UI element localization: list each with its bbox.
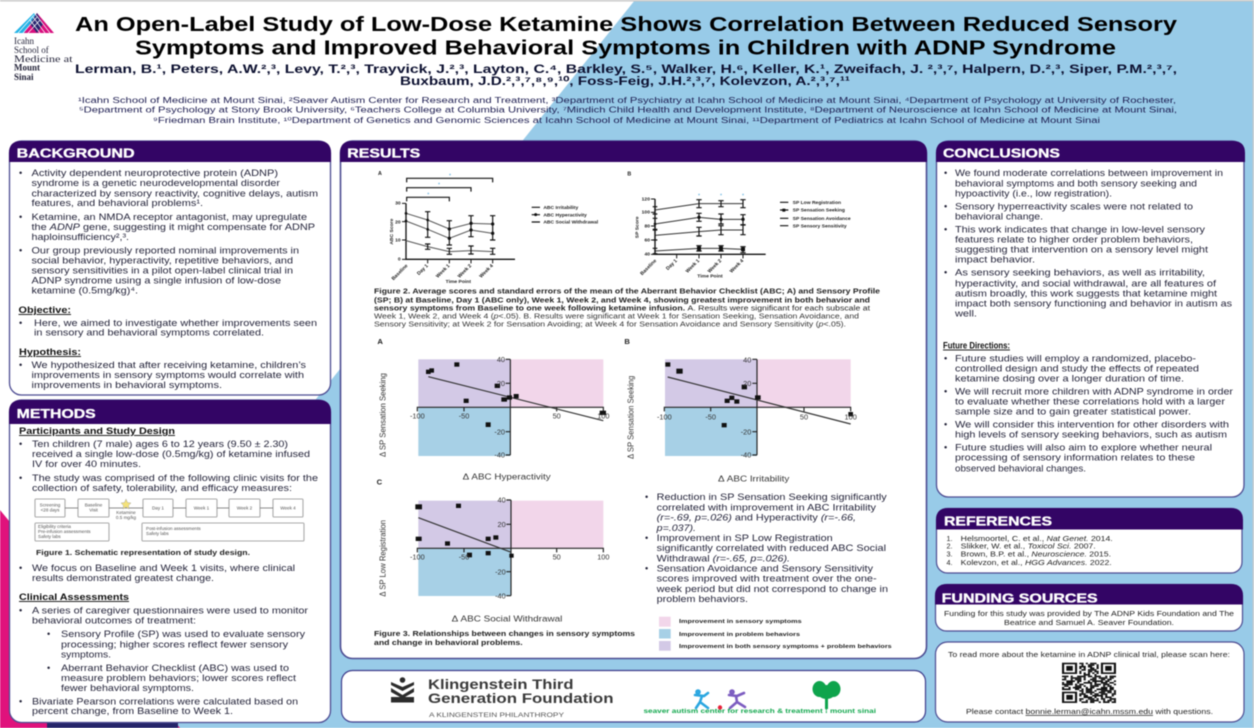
results bullets: Reduction in SP Sensation Seeking significantly bbox=[657, 492, 887, 502]
scatter plot A: -100 bbox=[410, 412, 425, 421]
logo: Icahn School of Medicine at Mount Sinai: School of bbox=[14, 45, 49, 55]
conclusions text: well. bbox=[954, 308, 977, 318]
results bullets: Sensation Avoidance and Sensory Sensitivity bbox=[657, 564, 873, 574]
significance brackets: * bbox=[438, 183, 440, 189]
scatter plot B bbox=[624, 337, 857, 484]
heading: funding sources: FUNDING SOURCES bbox=[942, 590, 1098, 606]
reference list: 3. bbox=[946, 550, 952, 558]
panel: sponsor logos bbox=[342, 670, 926, 722]
study design schematic: Safety labs bbox=[38, 534, 61, 539]
scatter plot A: 40 bbox=[497, 355, 505, 364]
participants and study design: • bbox=[19, 473, 22, 483]
reference list: Kolevzon, et al., HGG Advances. 2022. bbox=[961, 558, 1112, 567]
future directions: ketamine dosing over a longer duration of time. bbox=[955, 374, 1184, 384]
clinical assessments: Sensory Profile (SP) was used to evaluate sensory bbox=[61, 629, 305, 639]
line chart B: SP scores: SP Score bbox=[634, 216, 640, 238]
participants and study design: Participants and Study Design bbox=[19, 426, 175, 436]
icon: Mount Sinai tree bbox=[812, 681, 840, 709]
line chart A: ABC scores: 0 bbox=[398, 257, 401, 263]
background text: Our group previously reported nominal improvements in bbox=[32, 246, 299, 256]
quadrant legend: Improvement in problem behaviors bbox=[679, 632, 800, 638]
significance brackets: * bbox=[427, 193, 429, 199]
scatter plot A: -20 bbox=[494, 427, 505, 436]
clinical assessments: percent change, from Baseline to Week 1. bbox=[32, 706, 233, 716]
conclusions text: Sensory hyperreactivity scales were not related to bbox=[955, 202, 1193, 212]
panel: results bbox=[340, 141, 927, 658]
study design schematic: Eligibility criteria bbox=[38, 524, 71, 529]
clinical assessments: • bbox=[19, 606, 22, 616]
figure 2 caption bbox=[374, 289, 880, 328]
clinical assessments: processing; higher scores reflect fewer sensory bbox=[61, 640, 288, 650]
future directions: sample size and to gain greater statistical power. bbox=[955, 406, 1191, 416]
results bullets: correlated with improvement in ABC Irritability bbox=[657, 502, 876, 512]
scatter plot B: -100 bbox=[657, 412, 672, 421]
heading: methods: METHODS bbox=[17, 406, 96, 421]
background text: characterized by sensory reactivity, cognitive delays, autism bbox=[32, 188, 318, 198]
affiliations: ⁹Friedman Brain Institute, ¹⁰Department of Genetics and Genomic Sciences at Icahn School of Medicine at Mount Sinai, ¹¹Department of Pediatrics at Icahn School of Medicine at Mount Sinai bbox=[153, 116, 1100, 125]
future directions: • bbox=[944, 354, 947, 364]
future directions: Future studies will employ a randomized, placebo- bbox=[955, 354, 1196, 364]
scatter plot C: 40 bbox=[498, 496, 506, 505]
scatter plot C: Δ ABC Social Withdrawal bbox=[452, 614, 563, 624]
line chart B: SP scores: Time Point bbox=[697, 274, 723, 280]
heading: references: REFERENCES bbox=[944, 514, 1052, 528]
background text: the ADNP gene, suggesting it might compensate for ADNP bbox=[32, 222, 315, 232]
conclusions text: • bbox=[944, 224, 947, 234]
funding text bbox=[944, 609, 1234, 627]
clinical assessments bbox=[19, 592, 308, 716]
scatter plot B: 40 bbox=[743, 355, 751, 364]
conclusions text: hypoactivity (i.e., low registration). bbox=[955, 188, 1112, 198]
significance brackets: * bbox=[449, 173, 451, 179]
conclusions text: autism broadly, this work suggests that ketamine might bbox=[955, 288, 1218, 298]
study design schematic: Week 4 bbox=[280, 506, 296, 510]
scatter plot C: -20 bbox=[495, 567, 506, 576]
study design schematic: Post-infusion assessments bbox=[146, 526, 201, 531]
hypothesis: improvements in behavioral symptoms. bbox=[32, 380, 222, 390]
line chart A: ABC scores bbox=[378, 171, 599, 285]
study design schematic: Screening bbox=[40, 502, 61, 508]
line chart B: SP scores bbox=[627, 171, 851, 280]
title: Symptoms and Improved Behavioral Symptoms in Children with ADNP Syndrome bbox=[135, 38, 1116, 60]
scatter plot C: 100 bbox=[597, 553, 609, 562]
figure 1 caption: Figure 1. Schematic representation of study design. bbox=[36, 550, 250, 557]
study design schematic: Day 1 bbox=[152, 506, 164, 510]
figure 3 caption bbox=[374, 631, 635, 647]
participants and study design: collection of safety, tolerability, and efficacy measures: bbox=[32, 483, 292, 493]
conclusions text: features relate to higher order problem behaviors, bbox=[955, 234, 1193, 244]
Klingenstein name: Klingenstein Third bbox=[428, 676, 574, 692]
scatter plot C: 50 bbox=[553, 553, 561, 562]
scatter plot A: Δ SP Sensation Seeking bbox=[378, 373, 388, 457]
conclusions text: • bbox=[944, 202, 947, 212]
clinical assessments: • bbox=[47, 629, 50, 639]
line chart B: SP scores: * bbox=[698, 194, 700, 200]
line chart A: ABC scores: Week 1 bbox=[435, 263, 452, 280]
participants and study design: IV for over 40 minutes. bbox=[32, 459, 141, 469]
scatter plot C: C bbox=[377, 478, 383, 487]
study design schematic: Baseline bbox=[85, 502, 103, 508]
reference list: Slikker, W. et al., Toxicol Sci. 2007. bbox=[961, 542, 1096, 550]
conclusions text: • bbox=[944, 168, 947, 178]
authors: Lerman, B.¹, Peters, A.W.²,³, Levy, T.²,³, Trayvick, J.²,³, Layton, C.⁴, Barkley, S.⁵, Walker, H.⁶, Keller, K.¹, Zweifach, J. ²,³,⁷, Halpern, D.²,³, Siper, P.M.²,³,⁷, bbox=[75, 62, 1177, 76]
line chart B: SP scores: 60 bbox=[644, 237, 650, 243]
line chart B: SP scores: * bbox=[720, 194, 722, 200]
participants and study design: The study was comprised of the following clinic visits for the bbox=[32, 473, 318, 483]
hypothesis bbox=[19, 347, 306, 390]
background text: ketamine (0.5mg/kg)⁴. bbox=[32, 286, 138, 296]
line chart A: ABC scores: Baseline bbox=[391, 263, 410, 282]
scatter plot B: -50 bbox=[705, 412, 716, 421]
scatter plot B: 20 bbox=[743, 379, 751, 388]
scatter plot B: Δ SP Sensation Seeking bbox=[626, 375, 636, 459]
conclusions text: impact behavior. bbox=[955, 254, 1035, 264]
background text bbox=[19, 168, 318, 296]
line chart A: ABC scores: 10 bbox=[395, 238, 401, 244]
study design schematic: Ketamine bbox=[116, 510, 136, 515]
heading: conclusions: CONCLUSIONS bbox=[943, 146, 1060, 160]
focus note: We focus on Baseline and Week 1 visits, where clinical bbox=[32, 563, 295, 573]
scatter plot C: 20 bbox=[498, 520, 506, 529]
legend: SP Low Registration bbox=[793, 200, 841, 206]
figure 2 caption: Sensory Sensitivity; at Week 2 for Sensation Avoiding; at Week 4 for Sensation Avoidance and Sensory Sensitivity ( p<.05). bbox=[374, 321, 846, 328]
conclusions text: As sensory seeking behaviors, as well as irritability, bbox=[955, 268, 1205, 278]
scatter plot C bbox=[377, 478, 609, 624]
participants and study design bbox=[19, 426, 318, 493]
line chart B: SP scores: 120 bbox=[642, 196, 650, 202]
background text: features, and behavioral problems¹. bbox=[32, 198, 203, 208]
clinical assessments: symptoms. bbox=[61, 650, 111, 660]
scatter plot A bbox=[377, 337, 609, 482]
clinical assessments: behavioral outcomes of treatment: bbox=[32, 616, 196, 626]
affiliations: ¹Icahn School of Medicine at Mount Sinai, ²Seaver Autism Center for Research and Treatment, ³Department of Psychiatry at Icahn School of Medicine at Mount Sinai, ⁴Department of Psychology at University of Rochester, bbox=[78, 96, 1176, 105]
clinical assessments: Bivariate Pearson correlations were calculated based on bbox=[32, 696, 298, 706]
line chart A: ABC scores: Time Point bbox=[446, 279, 471, 285]
panel: references bbox=[936, 508, 1243, 573]
results bullets: • bbox=[645, 492, 648, 502]
future directions: • bbox=[944, 442, 947, 452]
significance brackets bbox=[407, 173, 493, 201]
conclusions text bbox=[944, 168, 1232, 318]
panel: conclusions bbox=[936, 141, 1245, 497]
conclusions text: We found moderate correlations between improvement in bbox=[955, 168, 1223, 178]
heading: results: RESULTS bbox=[347, 146, 421, 160]
line chart B: SP scores: Day 1 bbox=[665, 258, 679, 272]
clinical assessments: • bbox=[19, 696, 22, 706]
Seaver text: seaver autism center for research & treatment ⁞ mount sinai bbox=[644, 708, 876, 715]
conclusions text: This work indicates that change in low-level sensory bbox=[955, 224, 1205, 234]
quadrant legend: Improvement in both sensory symptoms + problem behaviors bbox=[679, 644, 892, 650]
clinical assessments: measure problem behaviors; lower scores reflect bbox=[61, 673, 297, 683]
study design schematic: Week 2 bbox=[237, 506, 253, 510]
clinical assessments: Aberrant Behavior Checklist (ABC) was used to bbox=[61, 663, 289, 673]
focus note: results demonstrated greatest change. bbox=[32, 573, 214, 583]
results bullets: week period but did not correspond to change in bbox=[656, 584, 888, 594]
legend: ABC Social Withdrawal bbox=[543, 220, 599, 226]
icon: Klingenstein logo bbox=[391, 677, 414, 702]
reference list: 1. bbox=[946, 534, 952, 543]
background text: Activity dependent neuroprotective protein (ADNP) bbox=[32, 168, 278, 178]
future directions: Future Directions: bbox=[943, 340, 1010, 350]
line chart A: ABC scores: Day 1 bbox=[416, 263, 430, 277]
scatter plot B: Δ ABC Irritability bbox=[718, 474, 790, 484]
future directions: • bbox=[944, 386, 947, 396]
clinical assessments: fewer behavioral symptoms. bbox=[61, 683, 194, 693]
line chart B: SP scores: Week 2 bbox=[707, 258, 723, 275]
logo: Icahn School of Medicine at Mount Sinai: Sinai bbox=[14, 72, 34, 82]
line chart B: SP scores: Baseline bbox=[639, 258, 658, 277]
legend: ABC Hyperactivity bbox=[543, 212, 587, 218]
scatter plot B: -20 bbox=[741, 427, 751, 436]
clinical assessments: Clinical Assessments bbox=[19, 592, 129, 602]
affiliations bbox=[78, 96, 1177, 125]
results bullets: significantly correlated with reduced ABC Social bbox=[657, 543, 886, 553]
results bullets: • bbox=[645, 533, 648, 543]
hypothesis: Hypothesis: bbox=[19, 347, 81, 357]
legend bbox=[780, 200, 851, 229]
quadrant legend: Improvement in sensory symptoms bbox=[679, 619, 802, 625]
logo: Icahn School of Medicine at Mount Sinai: Medicine at bbox=[14, 54, 73, 64]
logo: Icahn School of Medicine at Mount Sinai: Icahn bbox=[14, 36, 34, 46]
scatter plot B: 100 bbox=[845, 412, 857, 421]
background text: social behavior, hyperactivity, repetitive behaviors, and bbox=[32, 256, 293, 266]
conclusions text: impact both sensory functioning and behavior in autism as bbox=[955, 298, 1232, 308]
scatter plot C: -50 bbox=[459, 553, 469, 562]
background text: ADNP syndrome using a single infusion of low-dose bbox=[32, 276, 281, 286]
scatter plot A: 50 bbox=[553, 412, 561, 421]
funding text: Funding for this study was provided by The ADNP Kids Foundation and The bbox=[944, 609, 1234, 618]
scatter plot B: 50 bbox=[800, 412, 808, 421]
background text: syndrome is a genetic neurodevelopmental disorder bbox=[32, 178, 280, 188]
study design schematic: <28 days bbox=[41, 508, 60, 512]
hypothesis: improvements in sensory symptoms would correlate with bbox=[32, 370, 304, 380]
title: An Open-Label Study of Low-Dose Ketamine Shows Correlation Between Reduced Sensory bbox=[75, 14, 1178, 36]
results bullets: problem behaviors. bbox=[657, 594, 748, 604]
background text: Ketamine, an NMDA receptor antagonist, may upregulate bbox=[32, 212, 307, 222]
legend: SP Sensory Sensitivity bbox=[793, 223, 847, 229]
affiliations: ⁵Department of Psychology at Stony Brook University, ⁶Teachers College at Columbia University, ⁷Mindich Child Health and Development Institute, ⁸Department of Neuroscience at Icahn School of Medicine at Mount Sinai, bbox=[79, 106, 1177, 114]
results bullets: Withdrawal (r=-.65, p=.026). bbox=[657, 554, 790, 564]
contact line: Please contact bonnie.lerman@icahn.mssm.edu with questions. bbox=[966, 707, 1213, 716]
background text: haploinsufficiency²,³. bbox=[32, 232, 129, 242]
scatter plot A: -40 bbox=[494, 451, 505, 460]
Klingenstein name: A KLINGENSTEIN PHILANTHROPY bbox=[429, 713, 564, 719]
participants and study design: Ten children (7 male) ages 6 to 12 years (9.50 ± 2.30) bbox=[32, 439, 288, 449]
future directions: controlled design and study the effects of repeated bbox=[955, 364, 1199, 374]
future directions bbox=[943, 340, 1233, 474]
future directions: Future studies will also aim to explore whether neural bbox=[955, 442, 1212, 452]
conclusions text: suggesting that intervention on a sensory level might bbox=[955, 244, 1209, 254]
panel: funding sources bbox=[935, 584, 1243, 631]
future directions: We will recruit more children with ADNP syndrome in order bbox=[955, 386, 1233, 396]
line chart B: SP scores: 80 bbox=[644, 223, 650, 229]
line chart B: SP scores: * bbox=[742, 194, 744, 200]
scatter plot B: -40 bbox=[741, 451, 751, 460]
quadrant legend bbox=[659, 617, 892, 651]
scatter plot C: -40 bbox=[495, 591, 506, 600]
reference list: 4. bbox=[946, 558, 952, 567]
objective: Here, we aimed to investigate whether improvements seen bbox=[34, 318, 317, 328]
objective: • bbox=[19, 318, 22, 328]
scatter plot A: -50 bbox=[459, 412, 469, 421]
scatter plot A: 20 bbox=[497, 379, 505, 388]
results bullets bbox=[645, 492, 888, 604]
future directions: processing of sensory information relates to these bbox=[955, 452, 1195, 462]
future directions: to evaluate whether these correlations hold with a larger bbox=[955, 396, 1225, 406]
scatter plot B: B bbox=[624, 337, 630, 346]
future directions: high levels of sensory seeking behaviors, such as autism bbox=[955, 430, 1227, 440]
line chart A: ABC scores: A bbox=[378, 171, 382, 177]
line chart B: SP scores: B bbox=[627, 171, 631, 177]
study design schematic bbox=[35, 499, 304, 541]
scatter plot C: -100 bbox=[410, 553, 425, 562]
figure 2 caption: sensory symptoms from Baseline to one week following ketamine infusion. A. Results were significant for each subscale at bbox=[374, 306, 870, 313]
future directions: observed behavioral changes. bbox=[955, 464, 1086, 474]
figure 2 caption: Week 1, Week 2, and Week 4 ( p<.05). B. Results were significant at Week 1 for Sensation Seeking, Sensation Avoidance, and bbox=[374, 313, 859, 320]
results bullets: p=.037). bbox=[656, 523, 696, 533]
scatter plot A: A bbox=[377, 337, 383, 346]
logo: Icahn School of Medicine at Mount Sinai: Mount bbox=[14, 62, 40, 72]
line chart A: ABC scores: ABC Score bbox=[389, 218, 395, 245]
legend: ABC Irritability bbox=[543, 205, 578, 211]
figure 3 caption: Figure 3. Relationships between changes in sensory symptoms bbox=[374, 631, 635, 638]
hypothesis: We hypothesized that after receiving ketamine, children’s bbox=[32, 360, 306, 370]
participants and study design: received a single low-dose (0.5mg/kg) of ketamine infused bbox=[32, 449, 310, 459]
scatter plot A: Δ ABC Hyperactivity bbox=[463, 472, 552, 482]
logo: Icahn School of Medicine at Mount Sinai bbox=[14, 13, 73, 82]
line chart A: ABC scores: 20 bbox=[395, 219, 401, 225]
line chart B: SP scores: 40 bbox=[644, 252, 650, 258]
Klingenstein name bbox=[428, 676, 614, 719]
future directions: • bbox=[944, 420, 947, 430]
panel: methods bbox=[9, 400, 331, 722]
panel: QR code and contact bbox=[936, 642, 1244, 722]
study design schematic: Week 1 bbox=[194, 506, 210, 510]
figure 3 caption: and change in behavioral problems. bbox=[374, 640, 523, 647]
results bullets: (r=-.69, p=.026) and Hyperactivity (r=-.66, bbox=[657, 512, 856, 522]
focus note: • bbox=[19, 563, 22, 573]
line chart B: SP scores: Week 1 bbox=[685, 258, 701, 275]
results bullets: • bbox=[645, 564, 648, 574]
icon: QR code bbox=[1062, 664, 1116, 702]
funding text: Beatrice and Samuel A. Seaver Foundation. bbox=[1004, 618, 1174, 627]
clinical assessments: • bbox=[47, 663, 50, 673]
results bullets: scores improved with treatment over the one- bbox=[657, 574, 877, 584]
background text: sensory sensitivities in a pilot open-label clinical trial in bbox=[32, 266, 293, 276]
hypothesis: • bbox=[19, 360, 22, 370]
clinical assessments: A series of caregiver questionnaires were used to monitor bbox=[32, 606, 308, 616]
figure 2 caption: (SP; B) at Baseline, Day 1 (ABC only), Week 1, Week 2, and Week 4, showing greatest improvement in both behavior and bbox=[374, 297, 870, 304]
line chart B: SP scores: 100 bbox=[642, 210, 650, 216]
Klingenstein name: Generation Foundation bbox=[428, 690, 614, 706]
title bbox=[75, 14, 1178, 60]
line chart A: ABC scores: 30 bbox=[395, 201, 401, 207]
figure 2 caption: Figure 2. Average scores and standard errors of the mean of the Aberrant Behavior Checklist (ABC; A) and Sensory Profile bbox=[374, 289, 880, 296]
conclusions text: hyperactivity, and social withdrawal, are all features of bbox=[955, 278, 1217, 288]
background text: • bbox=[19, 168, 22, 178]
study design schematic: 0.5 mg/kg bbox=[116, 515, 137, 520]
scatter plot A: 100 bbox=[597, 412, 609, 421]
reference list bbox=[946, 534, 1113, 567]
background text: • bbox=[19, 212, 22, 222]
conclusions text: • bbox=[944, 268, 947, 278]
study design schematic: Visit bbox=[89, 508, 99, 512]
objective bbox=[18, 305, 317, 338]
line chart A: ABC scores: Week 4 bbox=[478, 263, 495, 280]
reference list: 2. bbox=[946, 542, 952, 550]
objective: in sensory and behavioral symptoms correlated. bbox=[34, 328, 264, 338]
conclusions text: behavioral change. bbox=[955, 212, 1043, 222]
study design schematic: Pre-infusion assessments bbox=[38, 529, 91, 534]
legend bbox=[532, 205, 599, 226]
line chart B: SP scores: Week 4 bbox=[729, 258, 745, 275]
reference list: Brown, B.P. et al., Neuroscience. 2015. bbox=[961, 550, 1111, 558]
conclusions text: behavioral symptoms and both sensory seeking and bbox=[955, 178, 1197, 188]
authors: Buxbaum, J.D.²,³,⁷,⁸,⁹,¹⁰, Foss-Feig, J.H.²,³,⁷, Kolevzon, A.²,³,⁷,¹¹ bbox=[400, 74, 850, 88]
reference list: Helsmoortel, C. et al., Nat Genet. 2014. bbox=[961, 534, 1113, 543]
scatter plot C: Δ SP Low Registration bbox=[378, 520, 388, 597]
results bullets: Improvement in SP Low Registration bbox=[657, 533, 833, 543]
legend: SP Sensation Seeking bbox=[793, 208, 845, 214]
focus note bbox=[19, 563, 295, 583]
legend: SP Sensation Avoidance bbox=[793, 216, 851, 222]
participants and study design: • bbox=[19, 439, 22, 449]
authors bbox=[75, 62, 1177, 88]
heading: background: BACKGROUND bbox=[17, 146, 135, 160]
objective: Objective: bbox=[18, 305, 71, 315]
scan prompt: To read more about the ketamine in ADNP clinical trial, please scan here: bbox=[948, 650, 1230, 659]
line chart A: ABC scores: Week 2 bbox=[457, 263, 473, 280]
icon: Seaver figures bbox=[695, 690, 745, 710]
future directions: We will consider this intervention for other disorders with bbox=[955, 420, 1229, 430]
background text: • bbox=[19, 246, 22, 256]
study design schematic: Safety labs bbox=[146, 531, 169, 536]
panel: background bbox=[9, 141, 331, 395]
